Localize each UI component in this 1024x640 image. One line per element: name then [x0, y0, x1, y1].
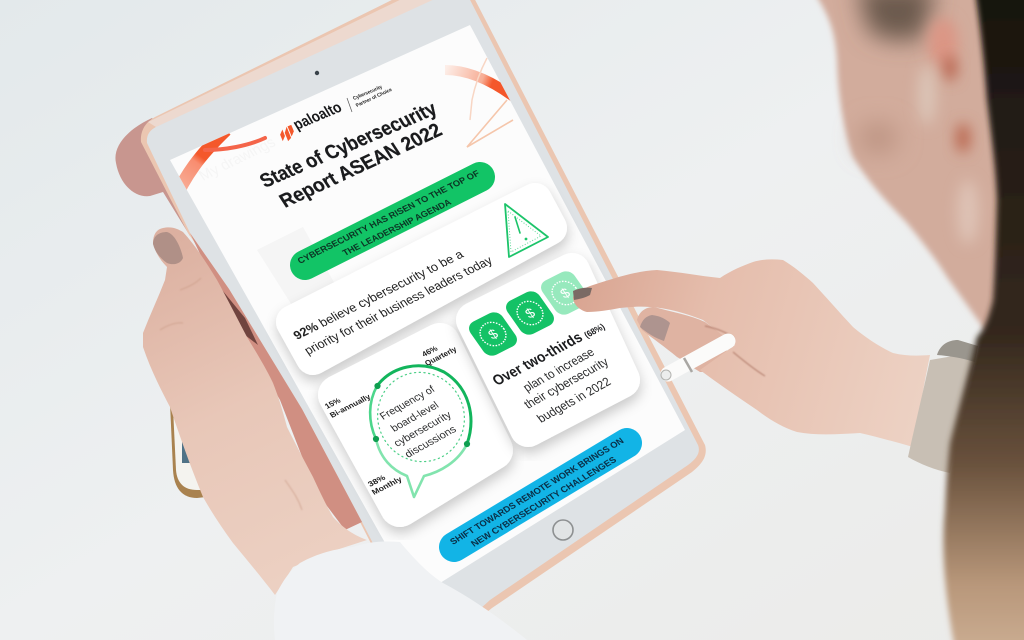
label bi-annually: Bi-annually [328, 392, 373, 420]
hand crease [160, 278, 302, 510]
logo [278, 84, 394, 143]
thumb [637, 307, 730, 372]
phone screen hint [182, 435, 191, 463]
bubble line 4: discussions [403, 424, 459, 460]
tablet rose-gold frame [141, 0, 706, 640]
back of tablet pale band [148, 0, 452, 127]
card background [338, 343, 493, 507]
person: blurred face [813, 0, 1024, 350]
budget line 1: plan to increase [520, 345, 597, 394]
tablet bezel [147, 0, 699, 640]
icon: dollar 3 [537, 268, 593, 318]
fingers behind the tablet [115, 118, 205, 240]
thumb nail [153, 232, 183, 264]
banner line 1: CYBERSECURITY HAS RISEN TO THE TOP OF [295, 168, 482, 266]
label 15%: 15% [323, 396, 343, 411]
panel: budget card [465, 268, 622, 429]
budget line 3: budgets in 2022 [534, 375, 614, 425]
bubble line 1: Frequency of [378, 384, 437, 422]
hand [143, 227, 367, 595]
banner line 2: THE LEADERSHIP AGENDA [341, 197, 454, 258]
crease between finger and thumb [705, 326, 765, 376]
label quarterly: Quarterly [423, 344, 459, 368]
card text line 2: priority for their business leaders today [302, 253, 496, 357]
bubble dark segment [377, 366, 471, 444]
label 38%: 38% [366, 473, 387, 489]
label 46%: 46% [420, 344, 440, 359]
labels [323, 344, 459, 497]
bubble medium segment [370, 386, 377, 439]
green pill [305, 177, 480, 265]
icon: dollar 2 [502, 288, 558, 338]
dark shadow between hand and bezel [218, 285, 258, 345]
speech bubble chart [363, 358, 479, 497]
bubble text [378, 384, 459, 460]
left hand holding tablet [143, 227, 367, 595]
blue banner [448, 436, 627, 549]
budget line 2: their cybersecurity [521, 355, 612, 411]
pink tablet back between hand and bezel [190, 233, 362, 530]
bubble line 2: board-level [389, 400, 441, 434]
bubble line 3: cybersecurity [392, 409, 455, 449]
icon: dollar 2: $ [522, 305, 538, 321]
pen tip [661, 370, 671, 380]
panel: frequency card [323, 343, 493, 507]
pen band [684, 358, 692, 372]
screen decoration: orange ribbons [179, 58, 514, 190]
blue banner line 1: SHIFT TOWARDS REMOTE WORK BRINGS ON [448, 436, 626, 547]
bubble light segment [376, 439, 467, 497]
hand [573, 259, 930, 447]
camera [315, 71, 319, 75]
right hand with pointing finger [573, 259, 930, 447]
logo wordmark: paloalto [290, 99, 345, 133]
icon: dollar 1 [465, 309, 521, 359]
phone behind the hand [170, 403, 206, 498]
green banner [295, 168, 482, 266]
screen decoration: orange ribbons: My drawings [196, 134, 279, 184]
icon: dollar 3: $ [557, 285, 573, 301]
hair [943, 0, 1024, 640]
phone face [173, 408, 204, 490]
blue pill [454, 443, 627, 547]
budget headline: Over two-thirds (68%) [489, 318, 608, 389]
bubble dots [373, 383, 470, 447]
icon: dollar 1: $ [485, 326, 501, 342]
label monthly: Monthly [370, 474, 404, 497]
tablet body [141, 0, 706, 640]
watch [908, 340, 978, 473]
blue banner line 2: NEW CYBERSECURITY CHALLENGES [469, 455, 618, 549]
stylus pen [661, 341, 728, 380]
bubble inner dotted ring [363, 358, 479, 476]
title [256, 98, 446, 212]
thumb nail [640, 315, 670, 341]
logo tagline 2: Partner of Choice [355, 87, 394, 109]
pen body [668, 341, 728, 374]
icon: warning triangle [505, 204, 548, 257]
card background [474, 271, 622, 429]
watch case [937, 340, 978, 362]
title line 1: State of Cybersecurity [256, 98, 442, 192]
card background [293, 200, 550, 358]
logo tagline 1: Cybersecurity [352, 84, 384, 102]
logo icon [278, 125, 296, 143]
screen [170, 25, 685, 598]
title line 2: Report ASEAN 2022 [276, 120, 446, 212]
panel: 92% card [291, 200, 550, 358]
logo divider [347, 98, 352, 112]
pointer nail [573, 288, 592, 300]
shirt cuff [274, 542, 527, 640]
watch strap [908, 352, 977, 473]
home button [553, 520, 573, 540]
card text line 1: 92% believe cybersecurity to be a [291, 247, 466, 342]
phone gold frame [170, 403, 206, 498]
